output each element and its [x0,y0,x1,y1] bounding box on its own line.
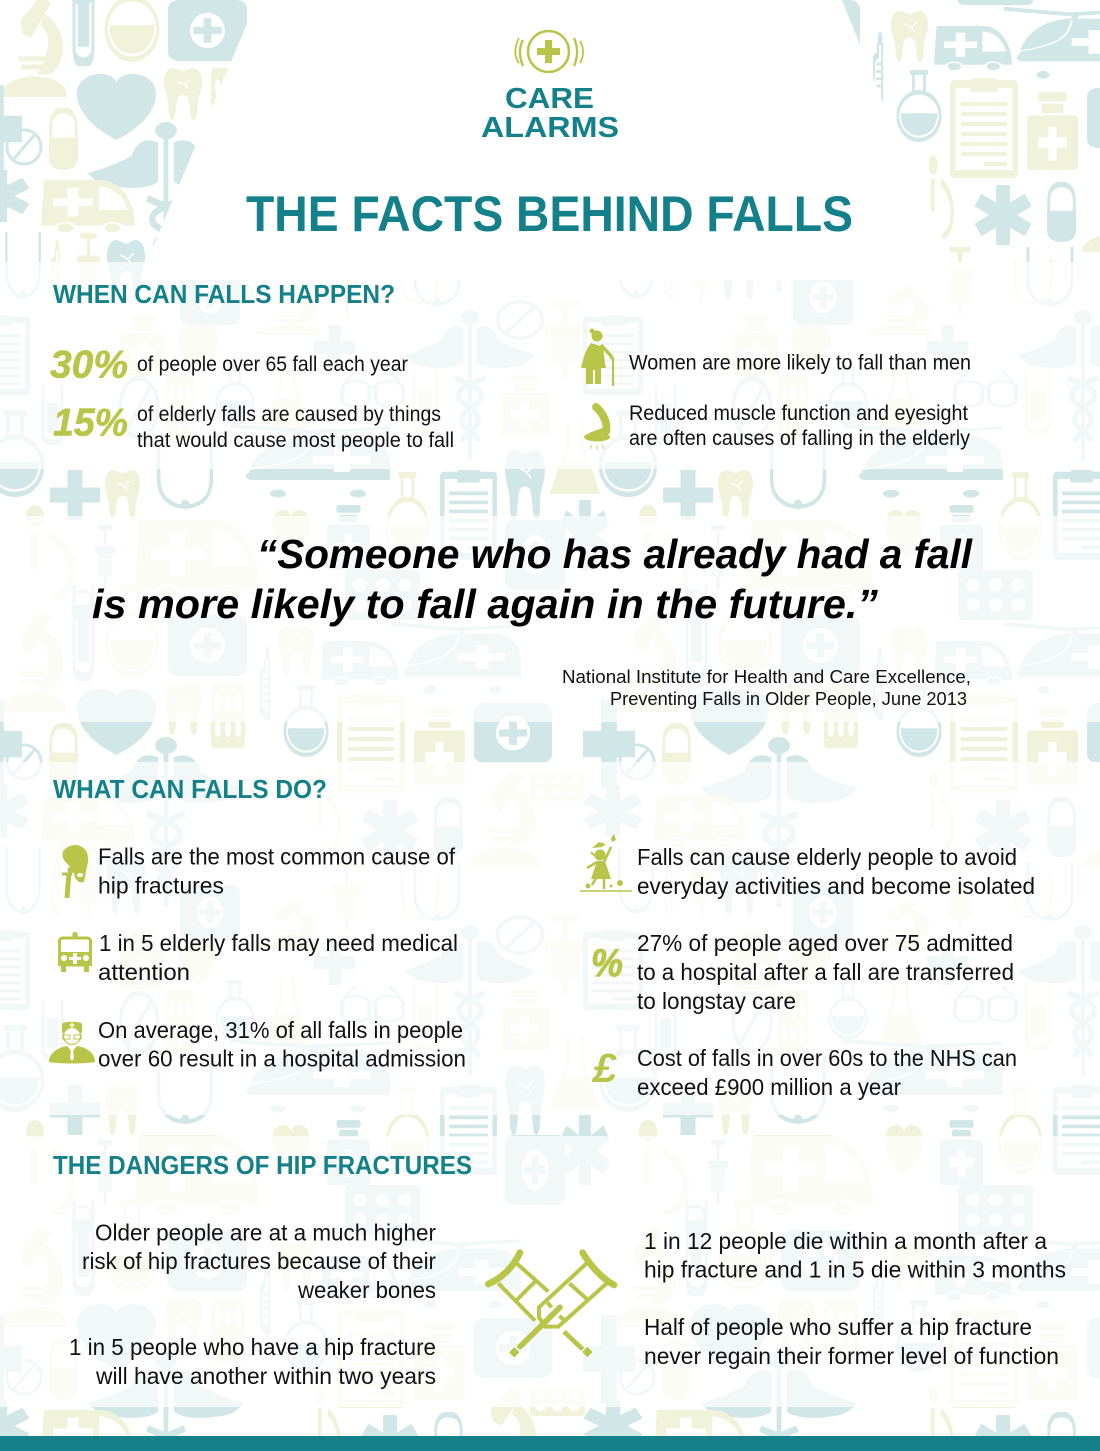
text: hospital admission: On average, 31% of all falls in people [98,1017,463,1043]
icon: girl with butterfly net [580,834,632,891]
icon: crossed crutches [488,1253,614,1358]
logo wordmark: ALARMS [481,112,619,144]
text: loss of function [644,1314,1059,1369]
heading: THE DANGERS OF HIP FRACTURES [53,1150,472,1180]
text: muscle and eyesight [629,402,970,450]
text: hospital admission [98,1017,466,1072]
text: longstay care: 27% of people aged over 75 admitted [637,930,1013,956]
text: hip fractures [98,844,455,898]
text: isolation: everyday activities and become isolated [637,873,1035,899]
text: women: Women are more likely to fall than men [629,352,971,374]
text: NHS cost: Cost of falls in over 60s to the NHS can [637,1045,1017,1071]
text: longstay care: to longstay care [637,988,796,1014]
text: month mortality [644,1228,1066,1282]
text: repeat fracture: 1 in 5 people who have a hip fracture [69,1334,436,1360]
quote source: National Institute for Health and Care Excellence, [562,666,971,687]
footer bar [0,1436,1100,1451]
heading: WHAT CAN FALLS DO? [53,774,327,804]
icon: alarm cross [515,31,583,72]
text: weaker bones: Older people are at a much higher [95,1220,436,1246]
text: 15% fact: of elderly falls are caused by things [137,403,441,426]
text: muscle and eyesight: Reduced muscle function and eyesight [629,402,968,425]
panel: dangers of hip fractures [53,1150,1066,1389]
icon: percent: % [591,942,623,985]
title: THE FACTS BEHIND FALLS [246,186,853,242]
text: NHS cost [637,1045,1017,1100]
icon: hip bone [62,845,88,898]
text: muscle and eyesight: are often causes of falling in the elderly [629,427,970,450]
text: hip fractures: Falls are the most common cause of [98,844,455,870]
text: hip fractures: hip fractures [98,872,224,898]
logo wordmark: CARE [505,83,594,115]
heading: WHEN CAN FALLS HAPPEN? [53,279,395,309]
text: repeat fracture [69,1334,436,1389]
logo: Care Alarms [481,31,619,144]
text: isolation [637,844,1035,899]
panel: what can falls do [49,774,1035,1100]
icon: elderly woman [581,328,613,386]
quote: is more likely to fall again in the future.” [92,581,878,627]
text: month mortality: hip fracture and 1 in 5 die within 3 months [644,1256,1066,1282]
quote source: Preventing Falls in Older People, June 2013 [610,688,967,709]
text: medical attention: 1 in 5 elderly falls may need medical [99,930,458,956]
text: medical attention: attention [98,959,190,985]
text: repeat fracture: will have another within two years [95,1363,436,1389]
text: weaker bones [82,1220,436,1303]
quote: “Someone who has already had a fall [257,531,974,577]
text: month mortality: 1 in 12 people die within a month after a [644,1228,1048,1254]
quote source [562,666,971,709]
quote [92,531,974,627]
icon: flexed arm [584,407,610,450]
icon: pound sign: £ [591,1045,617,1091]
text: 15% fact [137,403,454,452]
icon: ambulance front [58,932,92,972]
logo wordmark [481,83,619,144]
stat: 15%: 15% [53,402,128,444]
text: weaker bones: risk of hip fractures because of their [82,1248,436,1274]
text: medical attention [98,930,458,985]
icon: doctor [49,1022,95,1064]
text: loss of function: Half of people who suffer a hip fracture [644,1314,1032,1340]
text: 15% fact: that would cause most people to fall [137,429,454,452]
text: longstay care: to a hospital after a fall are transferred [637,959,1014,985]
text: NHS cost: exceed £900 million a year [637,1074,901,1100]
text: 30% fact: of people over 65 fall each year [137,353,408,376]
text: weaker bones: weaker bones [297,1277,436,1303]
text: isolation: Falls can cause elderly people to avoid [637,844,1017,870]
panel: when can falls happen [50,279,971,452]
text: loss of function: never regain their former level of function [644,1343,1059,1369]
stat: 30%: 30% [50,344,128,386]
text: hospital admission: over 60 result in a hospital admission [98,1046,466,1072]
text: longstay care [637,930,1014,1014]
